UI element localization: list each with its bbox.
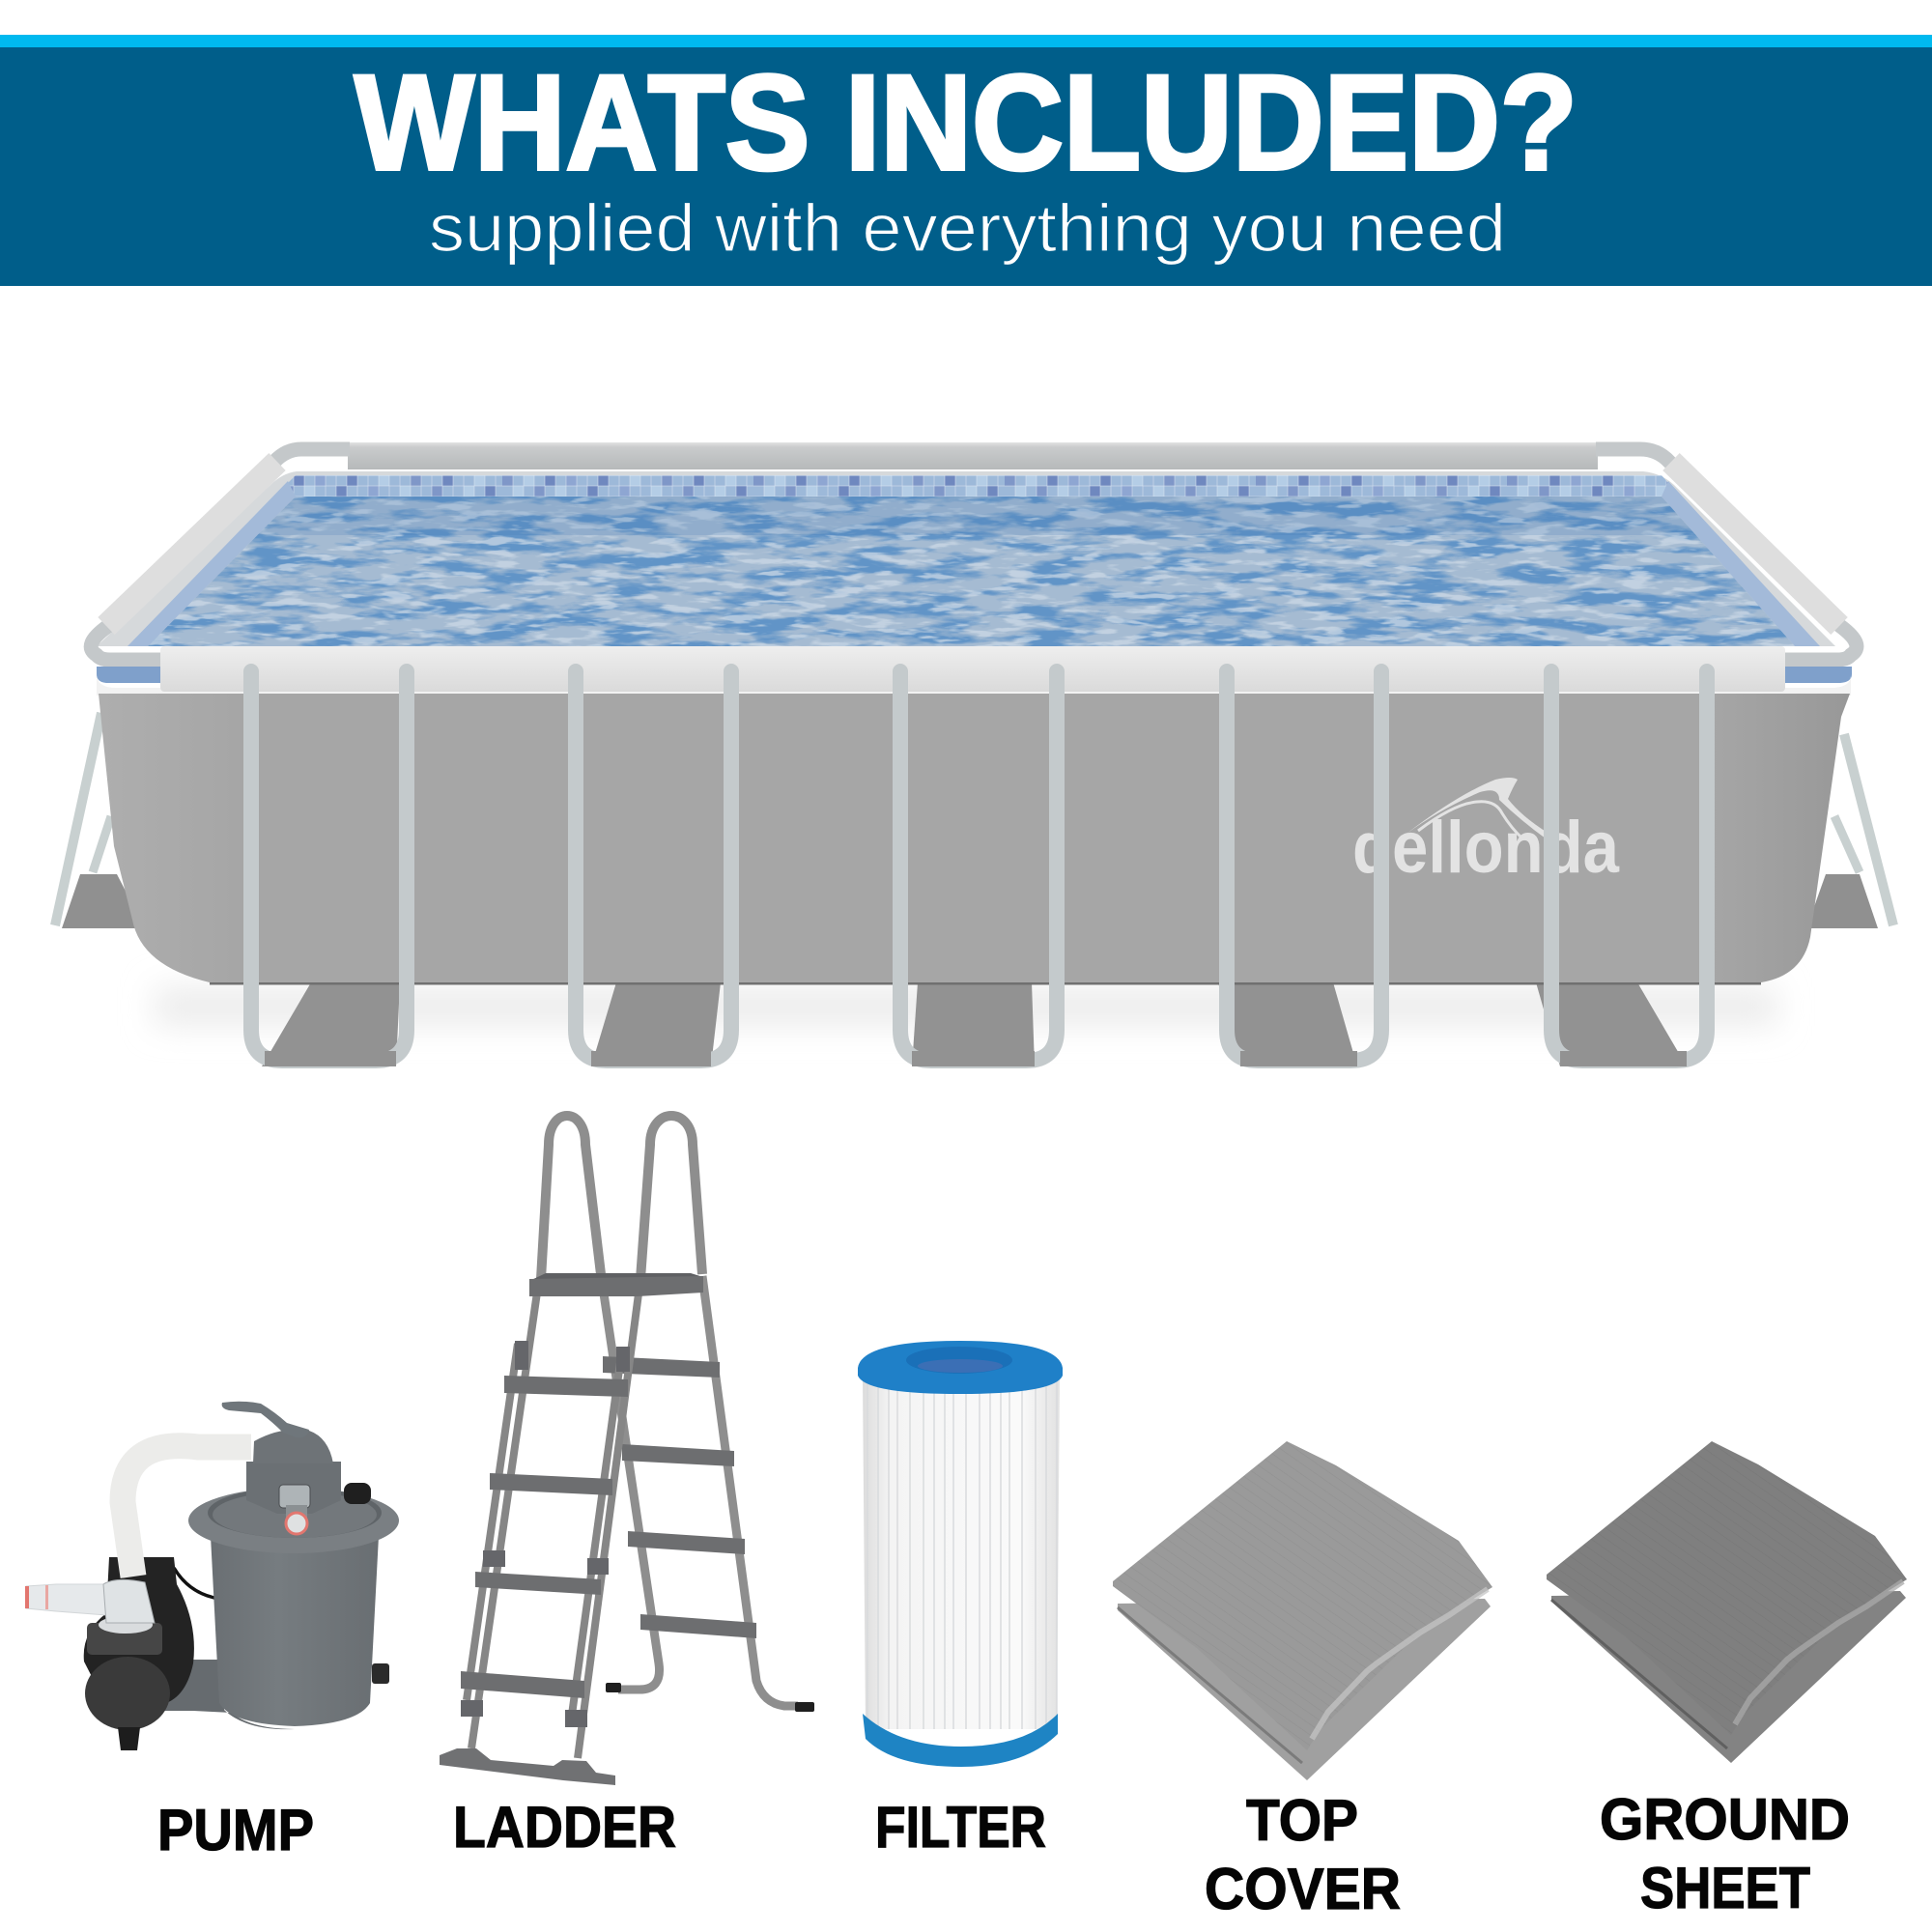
side support left bbox=[55, 713, 145, 928]
platform bbox=[529, 1273, 703, 1296]
floor shadow bbox=[155, 987, 1777, 1026]
pool wall bbox=[99, 694, 1850, 982]
side support right bbox=[1806, 734, 1893, 928]
left corner tube bbox=[91, 449, 350, 660]
label: ladder: LADDER bbox=[453, 1795, 676, 1860]
plastic wrinkles bbox=[1312, 1589, 1488, 1739]
top cap bbox=[858, 1341, 1063, 1394]
upper layer bbox=[1113, 1441, 1492, 1750]
foot tips over legs bbox=[265, 1051, 1687, 1066]
label: ground sheet: GROUND bbox=[1600, 1787, 1850, 1852]
label: top cover: TOP bbox=[1246, 1788, 1358, 1853]
title: WHATS INCLUDED? bbox=[355, 46, 1577, 198]
valve body bbox=[246, 1462, 341, 1514]
front rail bbox=[160, 646, 1785, 692]
header banner bbox=[0, 35, 1932, 286]
plastic wrinkles bbox=[1735, 1581, 1903, 1724]
right side rail bbox=[1671, 462, 1839, 626]
label: filter: FILTER bbox=[875, 1795, 1046, 1860]
lower layer bbox=[1551, 1591, 1906, 1763]
pool inner wall bbox=[97, 471, 1835, 646]
hose bbox=[123, 1446, 251, 1577]
dellonda logo bbox=[1352, 778, 1620, 889]
valve dome bbox=[253, 1430, 333, 1463]
power cable bbox=[174, 1568, 214, 1598]
pump bbox=[25, 1402, 399, 1750]
fold shadow bbox=[1118, 1607, 1302, 1763]
right corner tube bbox=[1596, 449, 1857, 660]
ground sheet bbox=[1547, 1441, 1907, 1763]
lower layer bbox=[1118, 1599, 1491, 1780]
ladder bbox=[440, 1116, 814, 1785]
back rail bbox=[348, 442, 1598, 469]
side mosaic pieces bbox=[97, 667, 166, 683]
rear feet tips bbox=[606, 1683, 814, 1712]
tank lid bbox=[188, 1488, 399, 1553]
front steps bbox=[461, 1376, 628, 1698]
pressure gauge bbox=[344, 1483, 371, 1504]
fold shadow bbox=[1551, 1600, 1727, 1748]
side valve bbox=[279, 1485, 310, 1534]
front frame bbox=[467, 1279, 640, 1758]
left side rail bbox=[106, 462, 277, 626]
top opening bbox=[906, 1347, 1012, 1374]
base plate bbox=[162, 1660, 295, 1729]
upright legs bbox=[251, 671, 1707, 1061]
clear inlet pipe bbox=[25, 1579, 155, 1623]
top cover bbox=[1113, 1441, 1492, 1780]
label: pump: PUMP bbox=[157, 1798, 314, 1862]
dellonda logo: dellonda bbox=[1352, 807, 1620, 889]
drain valve bbox=[372, 1663, 389, 1684]
label: top cover: COVER bbox=[1205, 1857, 1401, 1921]
label: top cover bbox=[1205, 1788, 1401, 1921]
feet bbox=[262, 982, 1687, 1066]
bottom ring bbox=[863, 1714, 1058, 1767]
label: ground sheet: SHEET bbox=[1640, 1856, 1810, 1920]
handrails bbox=[541, 1116, 702, 1279]
upper layer bbox=[1547, 1441, 1907, 1735]
tank bbox=[211, 1536, 379, 1726]
rear frame bbox=[601, 1274, 798, 1706]
valve handle bbox=[222, 1402, 309, 1437]
upper clamps bbox=[461, 1341, 630, 1727]
pump motor bbox=[84, 1557, 194, 1750]
label: ground sheet bbox=[1600, 1787, 1850, 1920]
white trim bbox=[97, 676, 1851, 696]
subtitle: supplied with everything you need bbox=[429, 190, 1506, 266]
mosaic tile band bbox=[128, 475, 1820, 646]
water bbox=[145, 497, 1799, 646]
pleated body bbox=[863, 1377, 1060, 1729]
base rail bbox=[440, 1748, 615, 1785]
rear steps bbox=[603, 1356, 756, 1638]
filter cartridge bbox=[858, 1341, 1063, 1767]
pool illustration bbox=[55, 442, 1893, 1066]
